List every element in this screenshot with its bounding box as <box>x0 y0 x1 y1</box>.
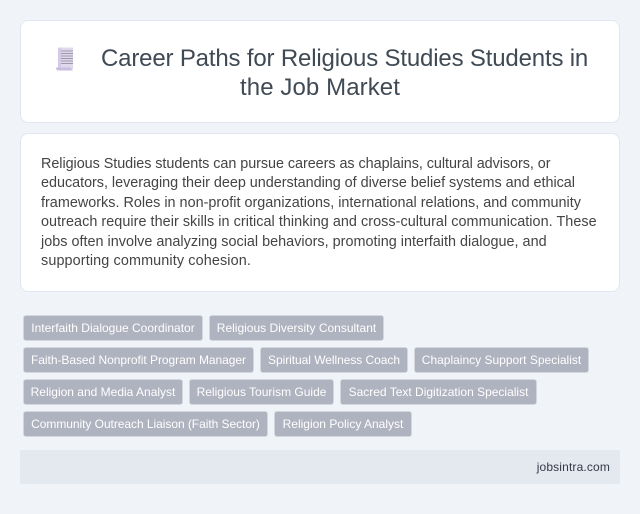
footer source: jobsintra.com <box>537 460 610 474</box>
panel: description card <box>20 133 620 292</box>
description text: outreach require their skills in critical thinking and cross-cultural communication. These <box>41 214 597 230</box>
tag <box>209 315 384 341</box>
tag: Sacred Text Digitization Specialist <box>349 385 528 399</box>
tag <box>23 379 183 405</box>
description text: educators, leveraging their deep understanding of diverse belief systems and ethical <box>41 175 575 191</box>
tag <box>260 347 408 373</box>
description text <box>40 156 597 269</box>
tag: Spiritual Wellness Coach <box>268 353 400 367</box>
footer bar <box>20 450 620 484</box>
description text: Religious Studies students can pursue careers as chaplains, cultural advisors, or <box>41 156 550 172</box>
tag <box>23 347 254 373</box>
description text: jobs often involve analyzing social behaviors, promoting interfaith dialogue, and <box>41 234 547 250</box>
tag <box>414 347 589 373</box>
tag: Community Outreach Liaison (Faith Sector) <box>31 417 260 431</box>
title <box>101 45 588 101</box>
panel: title card <box>20 20 620 123</box>
tag <box>23 411 268 437</box>
tag: Chaplaincy Support Specialist <box>422 353 581 367</box>
description text: supporting community cohesion. <box>41 253 251 269</box>
tag: Faith-Based Nonprofit Program Manager <box>31 353 246 367</box>
text: Career Paths for Religious Studies Students in <box>101 45 588 72</box>
tag <box>23 315 203 341</box>
text: the Job Market <box>240 74 400 101</box>
tag <box>340 379 537 405</box>
tag: Interfaith Dialogue Coordinator <box>31 321 195 335</box>
tag <box>189 379 334 405</box>
description text: frameworks. Roles in non-profit organizations, international relations, and community <box>41 195 581 211</box>
tag: Religion Policy Analyst <box>283 417 403 431</box>
tag <box>274 411 412 437</box>
icon: document scroll <box>56 47 73 70</box>
tag: Religion and Media Analyst <box>31 385 175 399</box>
tag: Religious Tourism Guide <box>197 385 326 399</box>
tag: Religious Diversity Consultant <box>217 321 376 335</box>
tag list <box>23 315 589 437</box>
